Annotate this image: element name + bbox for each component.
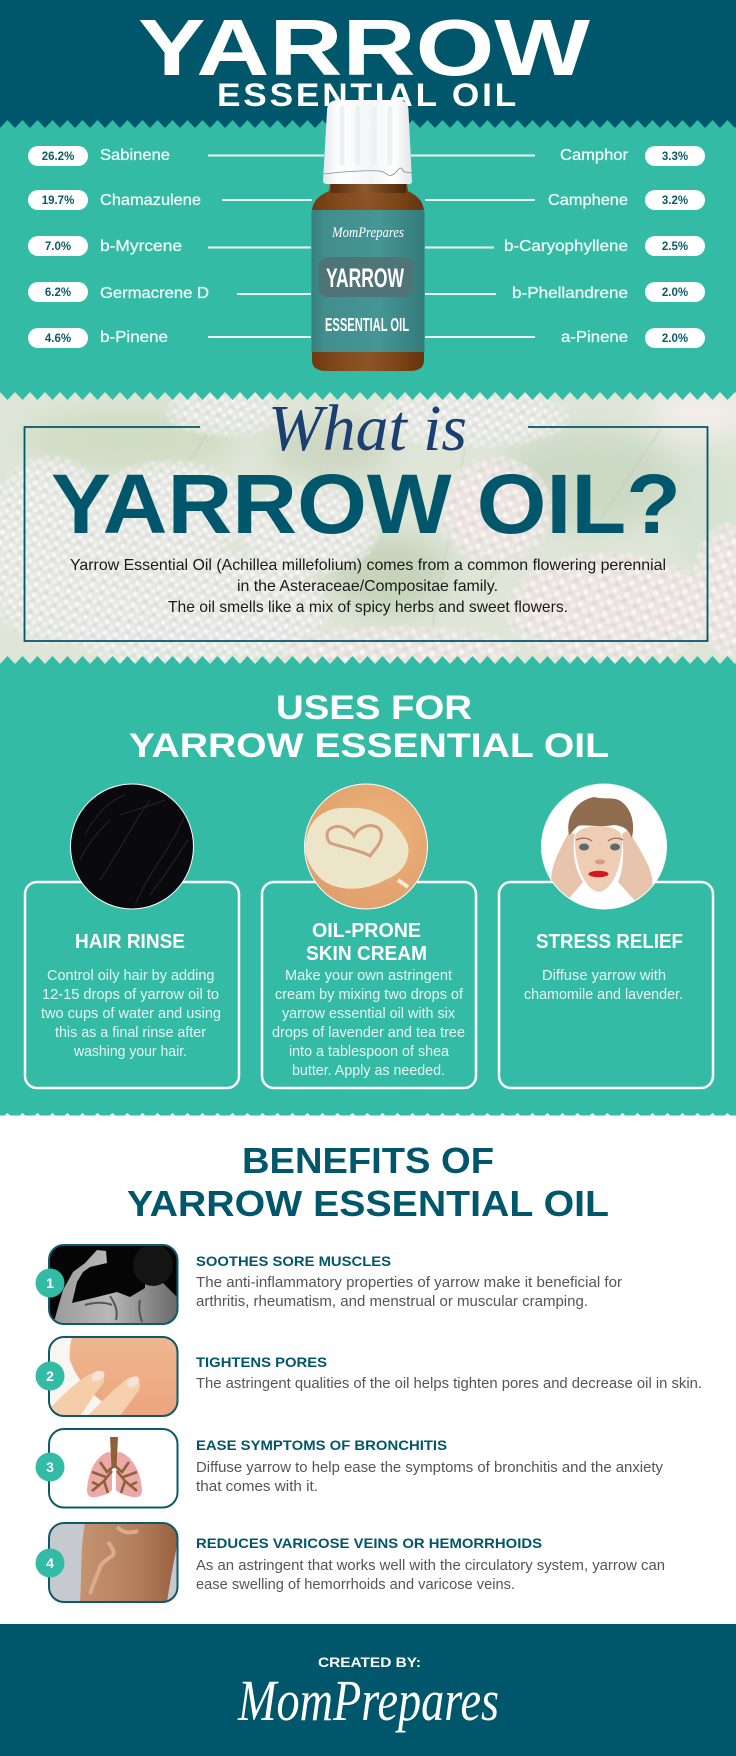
row: Chamazulene	[28, 190, 312, 210]
benefit text	[196, 1558, 665, 1593]
card heading: STRESS RELIEF	[536, 931, 683, 953]
benefit text: Diffuse yarrow to help ease the symptoms of bronchitis and the anxiety	[196, 1460, 664, 1476]
uses panel background	[0, 664, 736, 1116]
card text: Make your own astringent	[285, 968, 452, 984]
row: Camphene	[425, 190, 705, 210]
row: Camphor: 3.3%	[662, 151, 688, 163]
image: stressed woman	[541, 784, 667, 910]
footer label: CREATED BY:	[318, 1654, 421, 1670]
benefits heading: BENEFITS OF	[242, 1140, 494, 1181]
benefit heading: SOOTHES SORE MUSCLES	[196, 1253, 391, 1269]
row: b-Phellandrene: b-Phellandrene	[512, 285, 628, 302]
bottle illustration	[312, 100, 424, 371]
card text: Control oily hair by adding	[47, 968, 214, 984]
card text	[41, 968, 221, 1060]
benefit heading: REDUCES VARICOSE VEINS OR HEMORRHOIDS	[196, 1535, 542, 1551]
subtitle: ESSENTIAL OIL	[217, 78, 516, 114]
benefit text: ease swelling of hemorrhoids and varicose veins.	[196, 1577, 515, 1593]
number badge 2	[36, 1362, 64, 1390]
heading: YARROW OIL?: YARROW OIL?	[51, 457, 681, 551]
benefit text: The astringent qualities of the oil helps tighten pores and decrease oil in skin.	[196, 1376, 702, 1392]
benefit text: As an astringent that works well with the circulatory system, yarrow can	[196, 1558, 665, 1574]
row: Sabinene	[28, 146, 324, 166]
benefits heading: YARROW ESSENTIAL OIL	[127, 1183, 609, 1224]
cap ribs	[342, 106, 390, 165]
benefit heading: TIGHTENS PORES	[196, 1354, 327, 1370]
number badge 1: 1	[46, 1275, 54, 1291]
card text: into a tablespoon of shea	[289, 1044, 450, 1060]
label subtitle: ESSENTIAL OIL	[325, 315, 409, 335]
card text: 12-15 drops of yarrow oil to	[42, 987, 219, 1003]
label name plate	[318, 257, 414, 297]
benefits heading	[127, 1140, 609, 1224]
card: oil-prone skin cream	[262, 784, 476, 1088]
card text: this as a final rinse after	[55, 1025, 206, 1041]
uses heading: YARROW ESSENTIAL OIL	[129, 727, 609, 765]
benefit 3	[36, 1429, 664, 1508]
header band	[0, 0, 736, 128]
card text: yarrow essential oil with six	[282, 1006, 456, 1022]
image: lungs	[87, 1437, 142, 1497]
number badge 3	[36, 1452, 64, 1482]
card text	[272, 968, 465, 1079]
image: varicose veins	[49, 1523, 178, 1602]
row: Camphene: 3.2%	[662, 195, 688, 207]
row: b-Myrcene	[28, 236, 311, 256]
row: Sabinene: Sabinene	[100, 147, 170, 164]
image: cream heart on skin	[304, 784, 428, 910]
card text: cream by mixing two drops of	[275, 987, 464, 1003]
main title: YARROW	[138, 3, 591, 92]
footer logo text: MomPrepares	[237, 1668, 499, 1733]
benefits panel background	[0, 1113, 736, 1624]
label	[312, 210, 424, 352]
row: b-Pinene: b-Pinene	[100, 329, 168, 346]
image frame	[49, 1429, 178, 1508]
benefit heading: EASE SYMPTOMS OF BRONCHITIS	[196, 1437, 447, 1453]
left composition list	[28, 146, 324, 348]
photo background: yarrow flowers	[0, 388, 736, 674]
benefit 2	[36, 1337, 702, 1416]
row: b-Pinene	[28, 328, 311, 348]
neck shadow	[331, 184, 406, 193]
row: Camphene: Camphene	[548, 192, 628, 209]
card text: butter. Apply as needed.	[292, 1063, 445, 1079]
row: Chamazulene: 19.7%	[42, 195, 74, 207]
composition panel background	[0, 120, 736, 394]
benefit text: The anti-inflammatory properties of yarrow make it beneficial for	[196, 1275, 622, 1291]
number badge 2: 2	[46, 1368, 54, 1384]
card text: chamomile and lavender.	[524, 987, 683, 1003]
description text: in the Asteraceae/Compositae family.	[237, 578, 498, 595]
card heading: OIL-PRONE	[312, 920, 421, 942]
row: Germacrene D: 6.2%	[45, 287, 71, 299]
card text	[524, 968, 683, 1003]
label brand: MomPrepares	[331, 225, 404, 241]
heading: What is: What is	[268, 392, 467, 465]
cap	[323, 100, 412, 184]
benefit 1	[36, 1244, 622, 1324]
image: flexing muscles	[49, 1244, 178, 1324]
row: b-Caryophyllene: b-Caryophyllene	[504, 238, 628, 255]
uses heading: USES FOR	[276, 689, 472, 727]
benefit text	[196, 1275, 622, 1310]
row: b-Myrcene: 7.0%	[45, 241, 71, 253]
description text	[70, 557, 666, 616]
card heading: SKIN CREAM	[306, 943, 427, 965]
description text: Yarrow Essential Oil (Achillea millefolium) comes from a common flowering perennial	[70, 557, 666, 574]
row: Sabinene: 26.2%	[42, 151, 74, 163]
what is frame	[24, 427, 708, 641]
benefit text: arthritis, rheumatism, and menstrual or muscular cramping.	[196, 1294, 588, 1310]
label name: YARROW	[326, 263, 404, 293]
number badge 3: 3	[46, 1459, 54, 1475]
card text: two cups of water and using	[41, 1006, 221, 1022]
number badge 4: 4	[46, 1555, 54, 1571]
number badge 1	[36, 1268, 64, 1298]
cap seal line	[324, 168, 412, 175]
card text: Diffuse yarrow with	[542, 968, 666, 984]
benefit text	[196, 1460, 664, 1495]
right composition list	[411, 146, 705, 348]
row: a-Pinene	[425, 328, 705, 348]
row: a-Pinene: a-Pinene	[561, 329, 628, 346]
row: b-Caryophyllene	[425, 236, 705, 256]
row: b-Myrcene: b-Myrcene	[100, 238, 182, 255]
row: Germacrene D	[28, 282, 311, 302]
benefit 4	[36, 1523, 665, 1602]
row: a-Pinene: 2.0%	[662, 333, 688, 345]
card: stress relief	[499, 784, 713, 1088]
number badge 4	[36, 1548, 64, 1578]
footer band	[0, 1624, 736, 1756]
card heading: HAIR RINSE	[75, 931, 185, 953]
row: b-Phellandrene	[425, 282, 705, 302]
card text: washing your hair.	[73, 1044, 187, 1060]
row: b-Pinene: 4.6%	[45, 333, 71, 345]
row: Germacrene D: Germacrene D	[100, 285, 209, 302]
row: b-Phellandrene: 2.0%	[662, 287, 688, 299]
image: dark hair	[70, 784, 194, 910]
bottle body	[312, 184, 424, 371]
card: hair rinse	[25, 784, 239, 1088]
benefit text: that comes with it.	[196, 1479, 318, 1495]
row: Chamazulene: Chamazulene	[100, 192, 201, 209]
row: Camphor	[411, 146, 705, 166]
zigzag edges of flower panel	[0, 392, 736, 664]
card text: drops of lavender and tea tree	[272, 1025, 465, 1041]
image: fingers on skin	[49, 1337, 178, 1416]
uses heading	[129, 689, 609, 765]
row: b-Caryophyllene: 2.5%	[662, 241, 688, 253]
description text: The oil smells like a mix of spicy herbs and sweet flowers.	[168, 599, 568, 616]
row: Camphor: Camphor	[560, 147, 629, 164]
card heading	[306, 920, 427, 965]
